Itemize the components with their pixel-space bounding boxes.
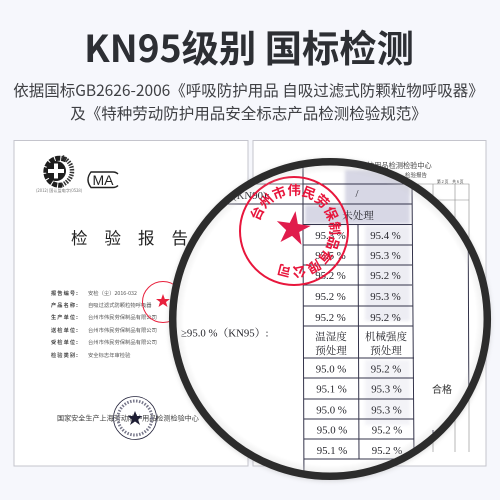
data table: 95.3 % [370, 291, 401, 303]
report details: 台州市伟民劳保制品有限公司 [88, 313, 157, 321]
data table: 95.1 % [317, 445, 347, 457]
data table [228, 168, 470, 470]
report details: 受检单位: [51, 338, 79, 346]
panel: test data page [253, 140, 486, 466]
red company stamp: 台州市伟民劳保制品有限公司 [250, 184, 342, 278]
page heading: 护用品检测检验中心 [367, 161, 432, 171]
report details: 安检（尘）2016-032 [88, 289, 137, 297]
report details: 台州市伟民劳保制品有限公司 [88, 326, 157, 334]
KN95 requirement: ≥95.0 %（KN95）: [181, 326, 268, 340]
data table: 95.4 % [370, 230, 401, 242]
red stamp [142, 282, 184, 322]
data table: 95.2 % [315, 270, 346, 282]
data table: 95.0 % [317, 424, 347, 436]
data table: 机械强度 [365, 329, 407, 344]
data table: 预处理 [315, 343, 347, 358]
magnifier ring [173, 162, 487, 476]
title: KN95级别 国标检测 [84, 19, 414, 73]
report details [51, 289, 157, 359]
background table [412, 184, 469, 452]
data table: 温湿度 [315, 329, 347, 344]
data table: 95.3 % [371, 384, 402, 396]
data table: 95.2 % [372, 445, 402, 457]
report details: 产品名称: [51, 301, 79, 309]
data table: / [356, 188, 358, 200]
data table: 合格 [432, 381, 452, 396]
data table: 95.2 % [370, 270, 401, 282]
data table: 95.3 % [371, 404, 402, 416]
page heading: 第 2 页 共 6 页 [437, 179, 464, 185]
subtitle text: 及《特种劳动防护用品安全标志产品检测检验规范》 [70, 102, 427, 124]
data table: 95.2 % [315, 312, 346, 324]
magnified view [176, 166, 484, 472]
KN90 label: (KN90): [233, 190, 270, 202]
data table: 未处理 [342, 208, 374, 223]
page heading: 检验报告 [405, 171, 428, 179]
panel: inspection report cover page [14, 140, 248, 466]
data table: 95.1 % [316, 384, 347, 396]
blue stamp [114, 396, 156, 440]
data table: 95.2 % [315, 291, 346, 303]
data table: 95.0 % [316, 404, 347, 416]
subtitle text: 依据国标GB2626-2006《呼吸防护用品 自吸过滤式防颗粒物呼吸器》 [13, 79, 484, 101]
data table: 预处理 [370, 343, 402, 358]
report heading: 检验报告 [71, 225, 205, 249]
data table: 95.2 % [370, 312, 401, 324]
data table: 95.3 % [315, 230, 346, 242]
lens shadow [168, 158, 492, 482]
icon: CMA mark: MA [92, 172, 114, 188]
page heading [367, 161, 464, 185]
data table: 95.0 % [316, 364, 346, 376]
report details: 台州市伟民劳保制品有限公司 [88, 338, 157, 346]
report details: 安全标志年审检验 [88, 351, 131, 359]
report details: 送检单位: [51, 326, 79, 334]
accreditation number: (2012) 国认监电字(0528) [36, 187, 83, 194]
data table: 95.3 % [370, 250, 401, 262]
data table: 95.2 % [372, 424, 402, 436]
scan noise [305, 170, 410, 425]
report details: 自吸过滤式防颗粒物呼吸器 [88, 301, 152, 309]
data table: 95.5 % [315, 250, 346, 262]
data table: 95.2 % [371, 364, 401, 376]
report details: 报告编号: [51, 289, 79, 297]
report details: 检验类别: [51, 351, 79, 359]
issuing organisation: 国家安全生产上海劳动防护用品检测检验中心 [57, 414, 199, 424]
report details: 生产单位: [51, 313, 79, 321]
lens inner shading [173, 162, 487, 476]
subtitle text [13, 79, 484, 124]
icon: safety emblem [46, 157, 72, 185]
